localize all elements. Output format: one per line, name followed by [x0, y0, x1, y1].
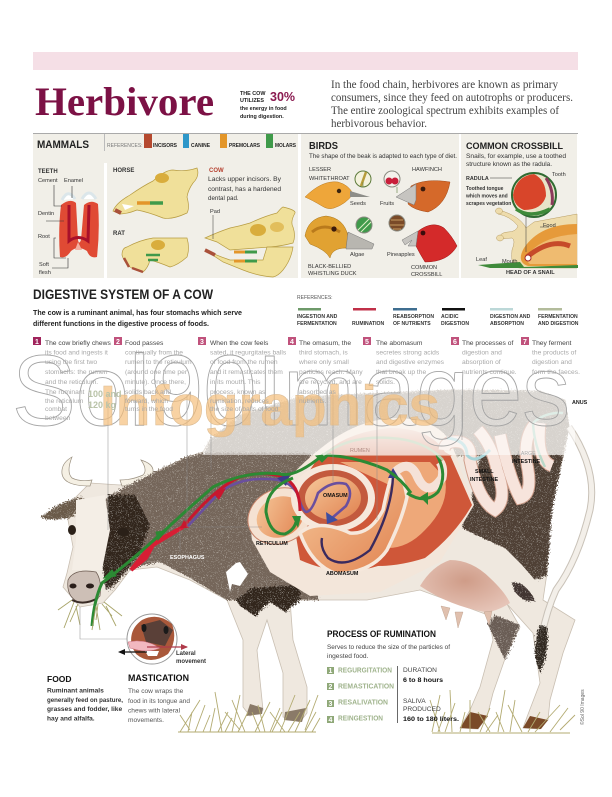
step 4: are recycled, and are	[299, 379, 362, 386]
step 4: The omasum, the	[299, 340, 351, 347]
tooth diagram: TEETH	[38, 169, 58, 175]
step 3: and it remasticates them	[210, 369, 283, 376]
tooth diagram: flesh	[39, 270, 51, 276]
process subtitle	[327, 644, 450, 660]
reference leader lines	[80, 390, 462, 639]
step 2: turns in the food	[125, 406, 173, 413]
intro text: herbivorous behavior.	[331, 118, 427, 130]
bird: lesser whitethroat: WHITETHROAT	[309, 176, 350, 182]
duration and saliva facts: 6 to 8 hours	[403, 677, 443, 684]
process steps: REINGESTION	[338, 716, 383, 722]
skull: rat	[113, 231, 188, 272]
step 1: between	[45, 415, 71, 422]
bird: lesser whitethroat	[305, 167, 371, 209]
skull: horse: HORSE	[113, 168, 134, 174]
panel: mammals	[33, 134, 298, 278]
digestive subtitle: The cow is a ruminant animal, has four stomachs which serve	[33, 308, 242, 317]
step 5: 5	[365, 339, 369, 346]
cutaway: omasum core	[305, 476, 361, 520]
anatomy labels: ANUS	[572, 400, 588, 406]
bird: hawfinch	[380, 167, 450, 212]
step 6: The processes of	[462, 340, 513, 347]
step 5: that break up the	[376, 369, 426, 376]
stat: 30 percent: UTILIZES	[240, 98, 264, 104]
snail illustration	[478, 173, 578, 268]
intro text	[331, 79, 573, 130]
snail labels: RADULA	[466, 176, 489, 182]
process steps: RESALIVATION	[338, 700, 388, 706]
snail labels: Tooth	[552, 172, 566, 178]
digestive references legend: AND DIGESTION	[538, 321, 579, 327]
digestive references legend: FERMENTATION	[538, 314, 578, 320]
text: mastication: chews with lateral	[128, 708, 181, 714]
step 5: solids.	[376, 379, 395, 386]
anatomy labels: INTESTINE	[470, 477, 499, 483]
digestive references legend: REFERENCES:	[297, 295, 333, 301]
process steps: 3	[329, 701, 333, 708]
cow: gray upper back	[203, 390, 569, 456]
cow: muzzle	[68, 525, 129, 603]
digestive subtitle: different functions in the digestive process of foods.	[33, 319, 209, 328]
step 2: rumen to the reticulum	[125, 359, 192, 366]
digestive route: reabsorption dark purple	[322, 468, 399, 562]
cow: brown neck and shoulder coat	[104, 453, 320, 600]
heading: process of rumination: PROCESS OF RUMINATION	[327, 629, 436, 640]
process steps: 2	[329, 684, 333, 691]
step 5: secretes strong acids	[376, 350, 440, 356]
text: mastication: MASTICATION	[128, 673, 189, 683]
digestive references legend: FERMENTATION	[297, 321, 337, 327]
step 1: combat	[45, 406, 67, 413]
skull: cow: COW	[209, 168, 224, 174]
label: lateral movement: Lateral	[176, 651, 196, 657]
cutaway: reticulum	[239, 478, 321, 554]
bird: black-bellied whistling duck: BLACK-BELLIED	[308, 264, 351, 270]
duration and saliva facts: SALIVA	[403, 698, 426, 705]
text: mastication: movements.	[128, 717, 164, 724]
process steps: REMASTICATION	[338, 684, 394, 690]
watermark: Infographics	[100, 374, 440, 438]
intro text: consumers, since they feed on autotrophs or producers.	[331, 92, 573, 104]
anatomy labels: RUMEN	[350, 448, 370, 454]
step 6	[451, 337, 517, 376]
step 1: stomachs: the rumen	[45, 369, 108, 376]
snail subtitle	[466, 153, 567, 168]
step 2: solids back and	[125, 389, 171, 396]
digestive references legend: OF NUTRIENTS	[393, 321, 431, 327]
process subtitle: Serves to reduce the size of the particles of	[327, 644, 450, 651]
skull: cow	[205, 168, 295, 277]
step 6: nutrients continue.	[462, 369, 517, 376]
stat: 30 percent	[240, 90, 295, 120]
snail labels: Toothed tongue	[466, 186, 504, 192]
step 1: and the reticulum.	[45, 379, 98, 386]
snail labels	[465, 172, 566, 276]
step 3: of food from the rumen	[210, 359, 278, 366]
tooth diagram: Soft	[39, 262, 49, 268]
cutaway: omasum outer	[291, 464, 375, 532]
bird: common crossbill: COMMON	[411, 265, 437, 271]
step 3: When the cow feels	[210, 340, 269, 347]
step 1: 100 and	[88, 389, 122, 399]
digestive route: ingestion green	[92, 454, 443, 626]
snail labels: HEAD OF A SNAIL	[506, 270, 555, 276]
step 2: (around one time per	[125, 369, 188, 376]
step 5: The abomasum	[376, 340, 423, 347]
bird: common crossbill: CROSSBILL	[411, 272, 442, 278]
cutaway: pale top band	[322, 428, 452, 456]
heading: digestive system: DIGESTIVE SYSTEM OF A COW	[33, 287, 213, 302]
step 3	[198, 337, 287, 413]
skull: cow: Pad	[210, 209, 220, 215]
text: food: hay and alfalfa.	[47, 716, 95, 722]
fade overlay: upper cow	[203, 384, 575, 455]
cow: intestines	[444, 423, 552, 510]
tooth references legend: INCISORS	[153, 143, 178, 149]
cow: dark rump patch	[462, 455, 563, 580]
bird: lesser whitethroat: LESSER	[309, 167, 331, 173]
step 2: forward, which	[125, 398, 168, 405]
cow: rear leg shading	[488, 615, 520, 660]
heading: birds: BIRDS	[309, 141, 338, 152]
step 6: digestion and	[462, 350, 502, 356]
text: mastication: food in its tongue and	[128, 698, 190, 705]
step 2: minute). Once there,	[125, 379, 186, 386]
process steps: 4	[329, 717, 333, 724]
skull: cow: dental pad.	[208, 195, 239, 202]
step 1: the reticulum	[45, 398, 84, 405]
cow: body silhouette	[63, 390, 575, 729]
anatomy labels: OMASUM	[323, 493, 348, 499]
text: food: FOOD	[47, 674, 72, 684]
anatomy labels	[170, 400, 588, 577]
text: mastication: The cow wraps the	[128, 688, 184, 695]
step 3: sated, it regurgitates balls	[210, 350, 287, 356]
step 1: its food and ingests it	[45, 350, 108, 356]
intro text: The entire zoological spectrum exhibits examples of	[331, 105, 559, 117]
panel: common crossbill / snail	[461, 134, 578, 278]
cutaway: rumen interior	[340, 462, 446, 548]
anatomy labels: INTESTINE	[512, 459, 541, 465]
step 4	[288, 337, 363, 405]
grass: mouth	[58, 600, 122, 630]
step 4: particles reach. Many	[299, 369, 363, 376]
top rule	[33, 133, 578, 134]
digestive route: pale intestinal lines	[323, 413, 563, 467]
digestive references legend: DIGESTION AND	[490, 314, 531, 320]
process steps	[327, 667, 394, 724]
title band	[33, 52, 578, 70]
tooth references legend: CANINE	[191, 143, 211, 149]
step 4: third stomach, is	[299, 350, 348, 356]
snail labels: scrapes vegetation	[466, 201, 511, 207]
skull: horse	[113, 168, 198, 218]
bird: lesser whitethroat: Seeds	[350, 201, 366, 207]
icon: mastication mouth circle	[118, 614, 188, 664]
anatomy labels: ABOMASUM	[326, 571, 359, 577]
label: lateral movement: movement	[176, 659, 206, 665]
stat: 30 percent: 30%	[270, 90, 295, 104]
step 3: rumination, reduces	[210, 398, 269, 405]
watermark: Sol90Images	[12, 335, 570, 447]
step 4: 4	[290, 339, 294, 346]
step 4: absorbed as	[299, 389, 336, 396]
step 1: 120 kg	[88, 400, 116, 410]
text: food: grasses and fodder, like	[47, 706, 122, 713]
tooth diagram: Dentin	[38, 211, 54, 217]
digestive references legend: ABSORPTION	[490, 321, 524, 327]
title: Herbivore	[35, 79, 214, 124]
digestive references legend: DIGESTION	[441, 321, 469, 327]
cow: stomach cutaway	[239, 418, 474, 596]
anatomy labels: ESOPHAGUS	[170, 555, 205, 561]
step 5: and digestive enzymes	[376, 359, 445, 366]
process steps: REGURGITATION	[338, 668, 392, 674]
bird: black-bellied whistling duck: Algae	[350, 252, 364, 258]
tooth diagram: Enamel	[64, 178, 83, 184]
tooth diagram: Cement	[38, 178, 58, 184]
digestive subtitle	[33, 308, 242, 328]
stat: 30 percent: during digestion.	[240, 114, 284, 120]
step 1: using the first two	[45, 359, 97, 366]
step 6: 6	[453, 339, 457, 346]
anatomy labels: RETICULUM	[256, 541, 288, 547]
process of rumination	[327, 629, 459, 724]
duration and saliva facts	[403, 667, 459, 723]
step 3: process, known as	[210, 389, 266, 396]
cutaway: reticulum core	[250, 489, 310, 545]
process steps: 1	[329, 668, 333, 675]
anatomy labels: SMALL	[475, 469, 494, 475]
tooth references legend	[107, 134, 297, 149]
step 7: form the faeces.	[532, 369, 580, 376]
tooth references legend: PREMOLARS	[229, 143, 261, 149]
intro text: In the food chain, herbivores are known as primary	[331, 79, 558, 91]
duration and saliva facts: DURATION	[403, 667, 437, 674]
step 7: digestion and	[532, 359, 572, 366]
step 1: The cow briefly chews	[45, 340, 111, 347]
skull: cow: contrast, has a hardened	[208, 186, 282, 193]
tooth diagram	[38, 169, 99, 276]
tooth references legend: MOLARS	[275, 143, 297, 149]
cutaway: abomasum	[300, 473, 407, 574]
step 2	[114, 337, 192, 413]
bird: black-bellied whistling duck	[305, 216, 374, 277]
cutaway: duct fold	[395, 462, 443, 488]
bird: common crossbill	[387, 215, 457, 278]
birds subtitle: The shape of the beak is adapted to each type of diet.	[309, 153, 457, 160]
step 3: in its mouth. This	[210, 379, 261, 386]
cow: dark cheek	[102, 495, 150, 590]
step 7: the products of	[532, 350, 576, 356]
label: lateral movement	[176, 651, 206, 665]
digestive references legend: INGESTION AND	[297, 314, 338, 320]
tooth references legend: REFERENCES:	[107, 143, 143, 149]
heading: mammals: MAMMALS	[37, 139, 89, 151]
tooth diagram: Root	[38, 234, 50, 240]
step 4: where only small	[298, 359, 349, 366]
step 7: They ferment	[532, 340, 572, 347]
text: food: Ruminant animals	[47, 688, 104, 694]
cow illustration	[40, 384, 592, 729]
cow: white shoulder patch	[226, 562, 248, 592]
process subtitle: ingested food.	[327, 653, 369, 660]
skull: rat: RAT	[113, 231, 125, 237]
skull: cow: Lacks upper incisors. By	[208, 176, 282, 183]
snail labels: Food	[543, 223, 556, 229]
step 1: 1	[35, 339, 39, 346]
bird: hawfinch: HAWFINCH	[412, 167, 442, 173]
bird: black-bellied whistling duck: WHISTLING DUCK	[308, 271, 357, 277]
bird: hawfinch: Fruits	[380, 201, 394, 207]
step 4: nutrients.	[299, 398, 327, 405]
cow: horns and ears	[40, 457, 178, 534]
digestive references legend: RUMINATION	[352, 321, 384, 327]
snail labels: Mouth	[502, 259, 518, 265]
duration and saliva facts: 160 to 180 liters.	[403, 716, 459, 723]
cow: tail	[535, 427, 592, 673]
heading: common crossbill: COMMON CROSSBILL	[466, 141, 563, 152]
snail labels: Leaf	[476, 257, 487, 263]
cow: udder	[420, 560, 510, 628]
digestive route: rumination red	[131, 474, 300, 570]
step 2: continually from the	[125, 350, 183, 356]
text: food	[47, 674, 123, 722]
credit: ©Sol 90 Images	[579, 689, 586, 725]
step 1: The ruminant	[45, 389, 85, 396]
digestive references legend: REABSORPTION	[393, 314, 434, 320]
anatomy labels: LARGE	[518, 451, 536, 457]
text: food: generally feed on pasture,	[47, 697, 123, 704]
step 3: 3	[200, 339, 204, 346]
text: mastication	[128, 673, 190, 724]
grass: front legs	[178, 692, 320, 732]
snail labels: which moves and	[465, 194, 508, 200]
cutaway: cream surround	[251, 418, 474, 596]
step 2: 2	[116, 339, 120, 346]
bird: common crossbill: Pineapples	[387, 252, 415, 258]
cow: flank spot	[512, 583, 535, 601]
duration and saliva facts: PRODUCED	[403, 706, 441, 713]
digestive references legend: ACIDIC	[441, 314, 459, 320]
cutaway: omasum ring	[298, 470, 368, 526]
grass: rear legs	[430, 690, 575, 733]
cow: hooves	[246, 704, 548, 729]
step 3: the size of balls of food	[210, 406, 279, 413]
panel: birds	[301, 134, 459, 278]
step 7	[521, 337, 580, 376]
digestive route: acid purple	[187, 479, 350, 527]
step 6: absorption of	[462, 359, 501, 366]
cow: white face blaze	[72, 495, 110, 570]
cutaway: red abdominal wall	[290, 455, 472, 571]
digestive references legend	[297, 295, 579, 327]
snail subtitle: Snails, for example, use a toothed	[466, 153, 567, 160]
step 2: Food passes	[125, 340, 164, 347]
stat: 30 percent: the energy in food	[240, 106, 287, 112]
stat: 30 percent: THE COW	[240, 91, 266, 97]
step 1	[33, 337, 122, 422]
step 7: 7	[523, 339, 527, 346]
snail subtitle: structure known as the radula.	[466, 161, 552, 168]
cow: chest speckle	[236, 585, 300, 616]
step 5	[363, 337, 445, 386]
